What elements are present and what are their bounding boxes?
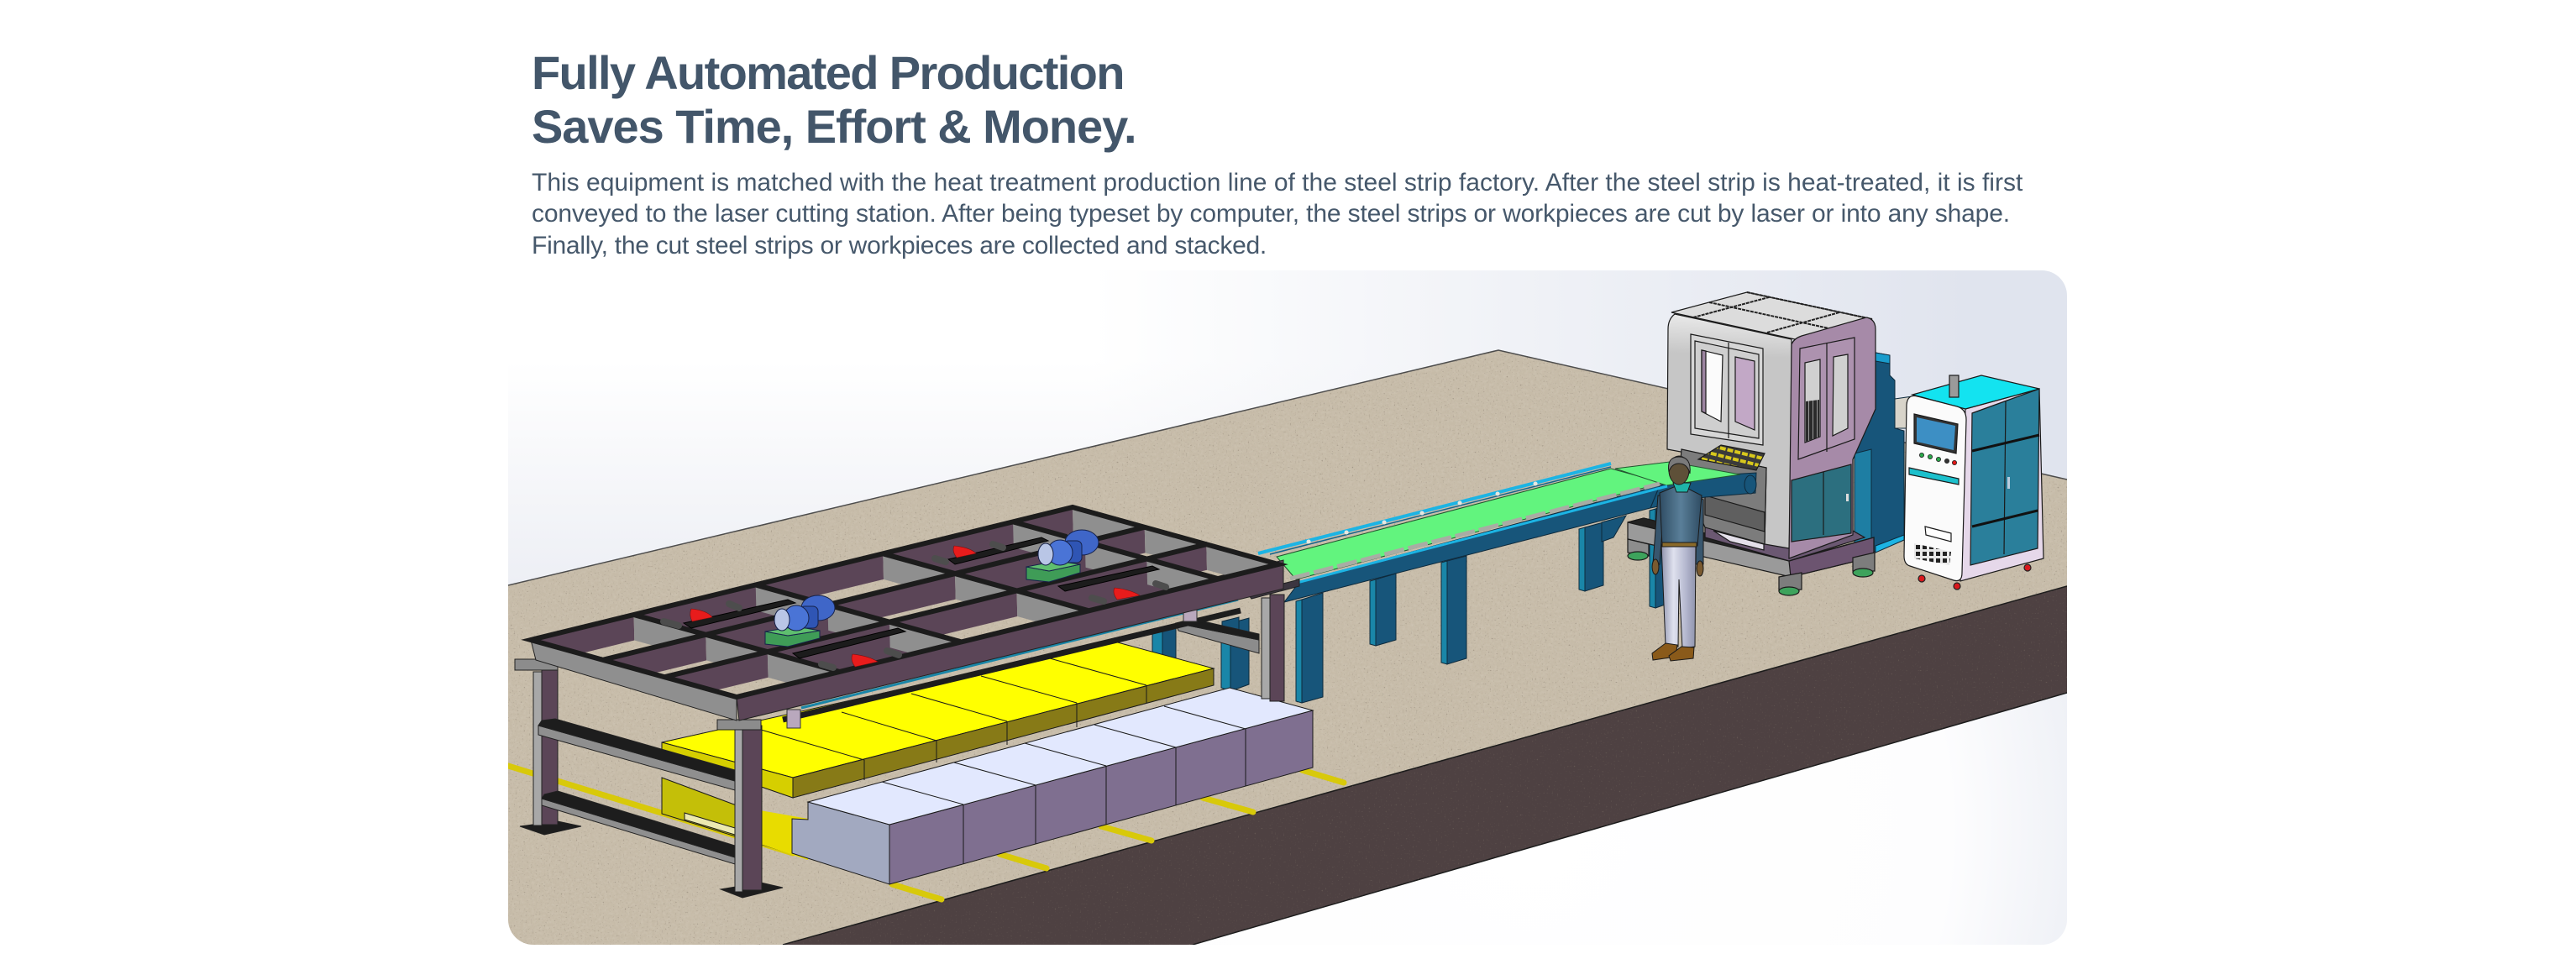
purple inner walls <box>531 507 1278 697</box>
machine top <box>1671 292 1872 339</box>
gantry frame <box>515 507 1299 898</box>
red cones <box>690 546 1140 667</box>
block top <box>808 688 1313 825</box>
bearing blocks <box>787 605 1197 728</box>
legs <box>1661 544 1696 648</box>
block left face <box>792 802 889 884</box>
frame outer left face <box>531 640 737 721</box>
back rail <box>1258 464 1611 554</box>
machine inner opening <box>1680 449 1766 544</box>
cabinet top <box>1912 375 2039 409</box>
machine base <box>1628 516 1875 595</box>
cabinet wheels <box>1918 564 2031 590</box>
block dividers <box>963 729 1246 864</box>
head <box>1669 456 1689 485</box>
description text: This equipment is matched with the heat treatment production line of the steel strip factory. After the steel strip is heat-treated, it is first <box>532 169 2023 197</box>
gear motor 2 <box>1026 530 1099 582</box>
cabinet side teal doors <box>1960 389 2043 581</box>
title <box>532 46 1136 153</box>
front rail <box>1297 486 1667 583</box>
conveyor support leg 2 <box>1370 574 1396 646</box>
conveyor <box>1258 462 1756 602</box>
yellow floor rods <box>508 766 1344 899</box>
control cabinet <box>1904 375 2043 590</box>
conveyor support leg 3 <box>1441 556 1466 664</box>
chiller unit behind machine <box>1855 353 1912 553</box>
cabinet beacon <box>1949 375 1959 397</box>
cabinet vent <box>1914 543 1951 565</box>
panel background <box>508 270 2067 945</box>
right leg <box>1247 579 1299 701</box>
grey rollers <box>664 544 1166 668</box>
hands <box>1652 559 1659 574</box>
rear lower rail <box>1176 619 1259 653</box>
machine grey front face <box>1667 314 1792 548</box>
cabinet cyan strip <box>1909 468 1959 485</box>
white block stack <box>792 688 1313 884</box>
machine lilac side <box>1789 317 1876 558</box>
lower yellow box <box>662 778 793 854</box>
frame top grid <box>531 507 1278 697</box>
conveyor legs behind gantry <box>1152 617 1249 691</box>
conveyor head arm <box>1650 473 1756 508</box>
cabinet screen <box>1914 414 1958 453</box>
title: Saves Time, Effort & Money. <box>532 100 1136 153</box>
black drive bars <box>684 537 1159 658</box>
gear motor 1 <box>765 595 835 647</box>
frame outer right face <box>737 560 1283 721</box>
green belt head <box>1615 462 1740 485</box>
panel: production line illustration <box>508 270 2067 945</box>
cabinet white front <box>1904 396 1966 581</box>
yellow top <box>662 642 1214 778</box>
conveyor side beam <box>1284 485 1660 602</box>
cabinet buttons <box>1919 453 1957 465</box>
block front faces <box>889 710 1313 884</box>
grey inner walls <box>585 507 1278 684</box>
conveyor support leg 1 <box>1296 593 1323 703</box>
left leg <box>515 659 581 835</box>
yellow dividers <box>761 658 1146 760</box>
title: Fully Automated Production <box>532 46 1124 99</box>
arms <box>1653 495 1665 564</box>
roller strip <box>1290 484 1660 579</box>
machine front window panel <box>1691 334 1763 445</box>
laser cutting machine <box>1628 292 1876 595</box>
yellow stack <box>662 642 1214 860</box>
conveyor support leg 4 <box>1579 516 1626 591</box>
conveyor support leg 5 <box>1650 508 1664 609</box>
yellow left face <box>662 742 793 798</box>
concrete floor <box>508 350 2067 945</box>
dark top beams <box>531 507 1278 697</box>
machine teal doors <box>1792 464 1851 542</box>
description text: conveyed to the laser cutting station. After being typeset by computer, the steel strips or workpieces are cut by laser or into any shape. <box>532 200 2010 228</box>
green belt <box>1277 469 1663 579</box>
description text: Finally, the cut steel strips or workpieces are collected and stacked. <box>532 232 1267 259</box>
torso <box>1660 485 1702 546</box>
shoes <box>1652 643 1677 660</box>
yellow side <box>793 668 1214 798</box>
roller pulley <box>1744 475 1756 494</box>
front leg <box>717 720 783 898</box>
description text <box>532 169 2023 259</box>
floor front face <box>783 586 2067 945</box>
cabinet label <box>1925 527 1951 542</box>
machine yellow rollers <box>1698 445 1765 470</box>
carriage rail <box>783 611 1241 720</box>
lower side rails <box>538 719 735 864</box>
operator figure <box>1652 456 1703 661</box>
